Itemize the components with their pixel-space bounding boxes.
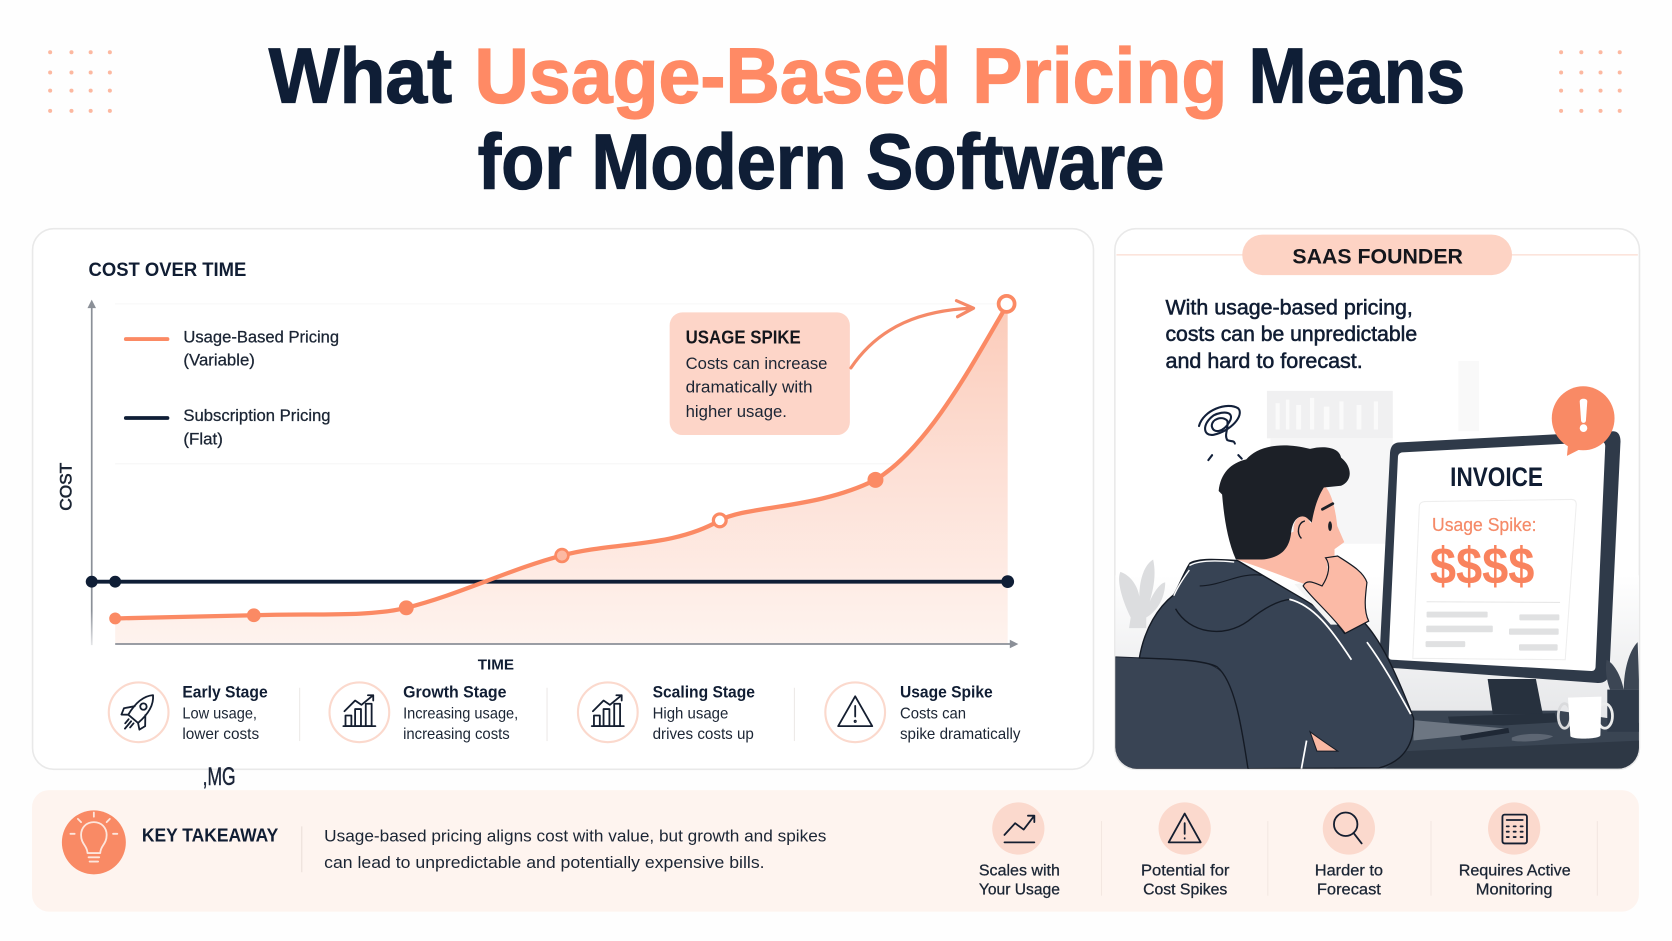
benefit: cost spikes bbox=[1141, 802, 1229, 899]
stray glyph fragment: ,MG bbox=[203, 764, 236, 791]
key takeaway text: Usage-based pricing aligns cost with value, but growth and spikes bbox=[324, 826, 826, 845]
x axis label: TIME bbox=[478, 657, 514, 674]
panel: key takeaway bbox=[32, 790, 1639, 912]
benefit: active monitoring: Monitoring bbox=[1476, 882, 1553, 899]
illustration: founder at monitor bbox=[1115, 361, 1640, 769]
stage: usage spike: spike dramatically bbox=[900, 726, 1021, 743]
icon: rocket bbox=[114, 686, 164, 738]
stage: early: Early Stage bbox=[182, 682, 268, 701]
plant on desk bbox=[1606, 642, 1640, 732]
title: What bbox=[269, 33, 452, 119]
founder quote: and hard to forecast. bbox=[1165, 350, 1363, 373]
callout: usage spike: dramatically with bbox=[686, 377, 813, 396]
keyboard and mouse bbox=[1413, 720, 1553, 741]
subscription line bbox=[86, 575, 1014, 588]
key takeaway text: can lead to unpredictable and potentially expensive bills. bbox=[324, 853, 765, 872]
monitor stand bbox=[1488, 679, 1543, 714]
badge: saas founder: SAAS FOUNDER bbox=[1292, 244, 1463, 268]
title: Means bbox=[1249, 33, 1465, 119]
benefit: harder to forecast bbox=[1315, 802, 1383, 899]
callout: usage spike: higher usage. bbox=[686, 402, 787, 421]
desk bbox=[1334, 711, 1639, 769]
y axis bbox=[87, 300, 96, 645]
area under usage curve bbox=[115, 304, 1008, 644]
x axis bbox=[115, 640, 1018, 648]
benefit: harder to forecast: Harder to bbox=[1315, 862, 1383, 879]
invoice heading: INVOICE bbox=[1450, 462, 1543, 492]
invoice dollar amount: $$$$ bbox=[1430, 537, 1534, 595]
invoice usage spike label: Usage Spike: bbox=[1432, 514, 1537, 535]
arrow: callout to peak bbox=[851, 301, 974, 368]
legend: Usage-Based Pricing bbox=[183, 327, 339, 346]
stage: usage spike: Costs can bbox=[900, 706, 966, 723]
benefit: cost spikes: Cost Spikes bbox=[1143, 882, 1228, 899]
key takeaway label: KEY TAKEAWAY bbox=[142, 825, 278, 845]
icon: warning triangle bbox=[838, 696, 872, 726]
title: Usage-Based Pricing bbox=[475, 33, 1227, 119]
title: for Modern Software bbox=[478, 120, 1164, 206]
badge: saas founder bbox=[1242, 235, 1512, 275]
person: hoodie bbox=[1139, 559, 1414, 769]
callout: usage spike: USAGE SPIKE bbox=[686, 327, 801, 347]
stage: usage spike: Usage Spike bbox=[900, 682, 993, 701]
usage-based curve bbox=[109, 296, 1015, 624]
chair bbox=[1115, 657, 1249, 769]
person: collar bbox=[1295, 584, 1338, 625]
stage: growth: Growth Stage bbox=[403, 682, 507, 701]
office background bbox=[1116, 391, 1639, 718]
founder quote: costs can be unpredictable bbox=[1165, 323, 1417, 346]
key takeaway text bbox=[324, 826, 826, 872]
icon: growth chart bbox=[343, 695, 375, 726]
benefit: active monitoring: Requires Active bbox=[1459, 862, 1571, 879]
legend: (Flat) bbox=[183, 430, 223, 449]
title bbox=[269, 33, 1465, 206]
coffee mug bbox=[1558, 697, 1612, 739]
stage: growth: Increasing usage, bbox=[403, 706, 518, 723]
benefit: scales with usage: Your Usage bbox=[979, 882, 1060, 899]
icon: scaling chart bbox=[592, 695, 624, 726]
benefit: cost spikes: Potential for bbox=[1141, 862, 1229, 879]
stage: early bbox=[109, 682, 268, 743]
stage: growth bbox=[330, 682, 518, 743]
person: hair bbox=[1219, 445, 1350, 560]
scribble above head bbox=[1199, 406, 1242, 460]
legend: Subscription Pricing bbox=[183, 406, 331, 425]
y axis label: COST bbox=[56, 462, 75, 511]
person: hand on chin bbox=[1303, 556, 1369, 633]
founder quote bbox=[1165, 297, 1417, 373]
stage: scaling: drives costs up bbox=[653, 726, 754, 743]
panel: cost over time chart bbox=[33, 229, 1094, 769]
callout: usage spike: Costs can increase bbox=[686, 354, 827, 373]
stage: growth: increasing costs bbox=[403, 726, 510, 743]
stage: scaling: Scaling Stage bbox=[653, 682, 755, 701]
panel: saas founder bbox=[1115, 229, 1640, 769]
decorative dots: top right bbox=[1559, 50, 1622, 113]
alert speech bubble bbox=[1552, 386, 1615, 456]
legend: (Variable) bbox=[183, 351, 255, 370]
icon: light bulb bbox=[62, 810, 126, 874]
person: ear and eye bbox=[1293, 504, 1333, 542]
benefit: active monitoring bbox=[1459, 802, 1571, 899]
stage: early: lower costs bbox=[182, 726, 259, 743]
stage: scaling bbox=[578, 682, 755, 743]
monitor bbox=[1379, 431, 1621, 683]
stage: usage spike bbox=[825, 682, 1021, 743]
stage: early: Low usage, bbox=[182, 706, 257, 723]
legend bbox=[126, 327, 339, 449]
person: face bbox=[1238, 486, 1344, 588]
benefit: harder to forecast: Forecast bbox=[1317, 882, 1382, 899]
chart heading: COST OVER TIME bbox=[89, 260, 247, 281]
decorative dots: top left bbox=[48, 50, 112, 113]
stage: scaling: High usage bbox=[653, 706, 728, 723]
benefit: scales with usage: Scales with bbox=[979, 862, 1060, 879]
benefit: scales with usage bbox=[979, 802, 1060, 899]
callout: usage spike bbox=[670, 312, 850, 435]
founder quote: With usage-based pricing, bbox=[1165, 297, 1413, 320]
